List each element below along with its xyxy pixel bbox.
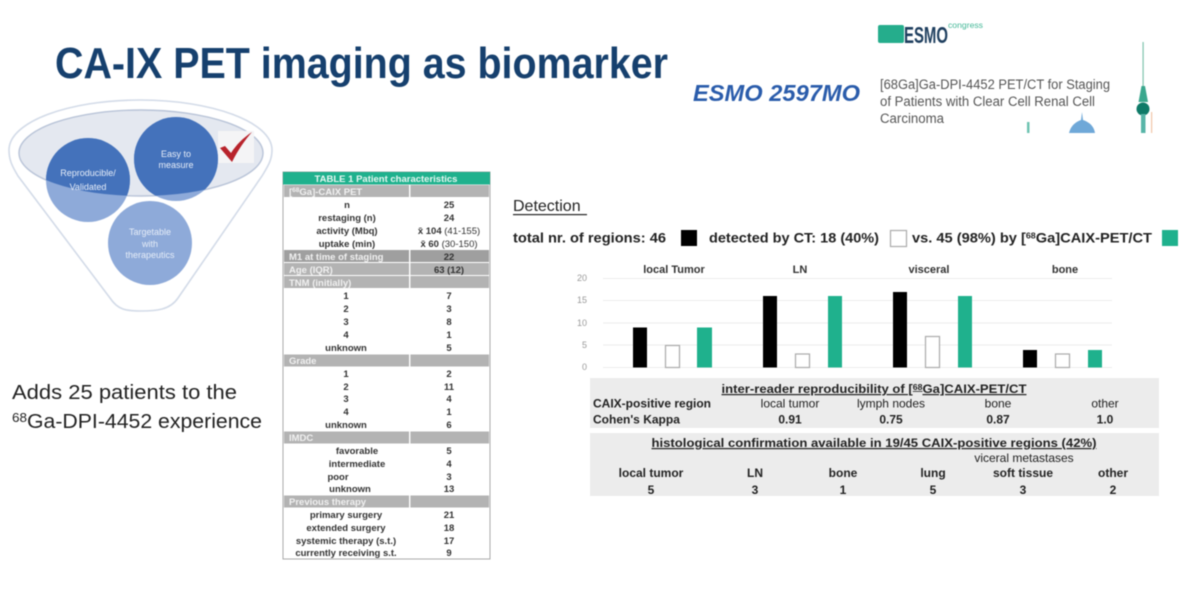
circle: easy to measure: measure (158, 160, 194, 170)
panel: inter-reader reproducibility: other (1091, 396, 1119, 410)
left column labels: restaging (n) (318, 213, 376, 224)
right column values: x̄ 104 (41-155) (418, 226, 480, 237)
right column values: 7 (446, 291, 452, 302)
left column labels: 2 (343, 382, 349, 393)
left column labels: 4 (343, 330, 349, 341)
circle: reproducible (46, 138, 130, 222)
panel: histological confirmation: viceral metastases (974, 451, 1074, 465)
legend: Ga]CAIX-PET/CT (1036, 230, 1152, 246)
left column labels: activity (Mbq) (316, 226, 378, 237)
panel: histological confirmation: bone (829, 466, 858, 480)
right column values: 6 (446, 420, 452, 431)
panel: histological confirmation: 5 (648, 483, 655, 497)
panel: histological confirmation (590, 433, 1159, 497)
panel: histological confirmation: 2 (1110, 483, 1117, 497)
section headings (289, 187, 384, 508)
panel: inter-reader reproducibility: Cohen's Kappa (593, 412, 680, 426)
left column labels: favorable (336, 446, 378, 457)
chart axis: 0 (582, 362, 587, 372)
panel: inter-reader reproducibility: lymph nodes (857, 396, 925, 410)
legend: total nr. of regions: 46 (513, 230, 666, 246)
left column labels: unknown (325, 420, 367, 431)
funnel diagram (9, 100, 272, 311)
right column values: 22 (444, 252, 454, 263)
left column labels: poor (327, 472, 349, 483)
left column labels: n (344, 200, 350, 211)
circle: targetable: Targetable (129, 227, 171, 237)
right column values: 4 (446, 394, 452, 405)
panel: inter-reader reproducibility: 0.75 (879, 412, 903, 426)
abstract title: of Patients with Clear Cell Renal Cell (880, 94, 1095, 109)
patients added note (12, 381, 262, 433)
patients added note: 68 (12, 410, 27, 425)
table header: TABLE 1 Patient characteristics (315, 174, 457, 185)
ESMO logo: congress (948, 20, 983, 30)
panel: histological confirmation: other (1098, 466, 1128, 480)
section headings: TNM (initially) (289, 278, 351, 289)
panel: histological confirmation: 1 (840, 483, 847, 497)
left column labels: intermediate (329, 459, 385, 470)
table: patient characteristics (283, 172, 490, 559)
circle: reproducible: Reproducible/ (60, 168, 116, 178)
bar chart (577, 264, 1112, 372)
abstract title: Carcinoma (880, 111, 944, 126)
right column values: 1 (446, 330, 452, 341)
chart axis: 5 (582, 340, 587, 350)
right column values: 21 (444, 510, 455, 521)
icon: red check mark (218, 131, 254, 163)
left column labels: currently receiving s.t. (295, 548, 397, 559)
chart axis: 15 (577, 295, 587, 305)
section headings: Ga]-CAIX PET (299, 187, 362, 198)
circle: easy to measure (134, 117, 218, 201)
circle: targetable: therapeutics (125, 250, 175, 260)
left column labels: 1 (343, 369, 349, 380)
abstract title (880, 77, 1110, 126)
left column labels: 1 (343, 291, 349, 302)
right column values: 17 (444, 536, 454, 547)
right column values: 3 (446, 304, 452, 315)
chart category labels (643, 264, 1078, 276)
left column labels: 3 (343, 317, 349, 328)
chart category labels: visceral (909, 264, 949, 276)
abstract title: [68Ga]Ga-DPI-4452 PET/CT for Staging (880, 77, 1110, 92)
section headings: IMDC (289, 433, 313, 444)
left column labels: unknown (329, 484, 371, 495)
panel: histological confirmation: LN (747, 466, 763, 480)
section headings: Age (IQR) (289, 265, 333, 276)
right column values: 1 (446, 407, 452, 418)
right column values (418, 200, 480, 559)
right column values: 8 (446, 317, 452, 328)
section headings: [ (289, 187, 292, 198)
right column values: 4 (446, 459, 452, 470)
bars: LN (763, 296, 842, 368)
detection heading: Detection (513, 198, 581, 215)
ESMO logo (878, 20, 983, 48)
panel: histological confirmation: local tumor (619, 466, 684, 480)
panel: histological confirmation: soft tissue (993, 466, 1053, 480)
circle: reproducible: Validated (70, 182, 106, 192)
patients added note: Adds 25 patients to the (12, 381, 237, 404)
left column labels: uptake (min) (319, 239, 375, 250)
right column values: 5 (446, 343, 452, 354)
section headings: M1 at time of staging (289, 252, 384, 263)
panel: histological confirmation: 5 (930, 483, 937, 497)
chart axis: 20 (577, 273, 587, 283)
abstract number: ESMO 2597MO (693, 80, 860, 106)
right column values: 25 (444, 200, 455, 211)
right column values: 11 (444, 382, 455, 393)
section bands (284, 185, 489, 508)
table header (283, 172, 490, 185)
panel: histological confirmation: histological confirmation available in 19/45 CAIX-positive regions (42%) (652, 436, 1097, 450)
left column labels: extended surgery (306, 523, 386, 534)
right column values: 5 (446, 446, 452, 457)
bars: visceral (893, 292, 972, 368)
right column values: 18 (444, 523, 454, 534)
ESMO logo: ESMO (904, 22, 948, 48)
chart axis (577, 273, 1112, 372)
chart category labels: bone (1052, 264, 1078, 276)
panel: histological confirmation: 3 (752, 483, 759, 497)
panel: inter-reader reproducibility (590, 378, 1159, 428)
left column labels: 4 (343, 407, 349, 418)
funnel opening (19, 110, 263, 196)
legend: 68 (1026, 230, 1036, 240)
legend: CT swatch (681, 230, 697, 246)
panel: inter-reader reproducibility: bone (985, 396, 1012, 410)
patients added note: Ga-DPI-4452 experience (27, 410, 262, 433)
section headings: Grade (289, 356, 316, 367)
right column values: 2 (446, 369, 452, 380)
panel: inter-reader reproducibility: 0.87 (986, 412, 1010, 426)
left column labels: primary surgery (310, 510, 383, 521)
funnel outline (9, 100, 272, 311)
section headings: Previous therapy (289, 497, 367, 508)
legend (513, 230, 1178, 246)
legend: vs. 45 (98%) by [ (912, 230, 1021, 246)
panel: inter-reader reproducibility: 68 (913, 383, 923, 392)
circle: targetable (108, 201, 192, 285)
bars: local tumor (633, 328, 712, 368)
chart category labels: local Tumor (643, 264, 705, 276)
left column labels (295, 200, 397, 559)
chart axis: 10 (577, 318, 587, 328)
right column values: 13 (444, 484, 454, 495)
left column labels: systemic therapy (s.t.) (296, 536, 396, 547)
bars: bone (1023, 350, 1102, 368)
panel: histological confirmation: lung (920, 466, 946, 480)
panel: inter-reader reproducibility: CAIX-positive region (593, 396, 711, 410)
table frame (283, 172, 490, 559)
right column values: 24 (444, 213, 455, 224)
right column values: 9 (446, 548, 452, 559)
legend: detected by CT: 18 (40%) (709, 230, 879, 246)
circle: targetable: with (141, 239, 158, 249)
icon: Berlin skyline (1027, 42, 1152, 133)
right column values: 63 (12) (434, 265, 464, 276)
legend: outline swatch (890, 230, 906, 246)
circle: easy to measure: Easy to (161, 149, 191, 159)
title: CA-IX PET imaging as biomarker (55, 39, 668, 88)
section headings: 68 (292, 187, 300, 194)
left column labels: unknown (325, 343, 367, 354)
right column values: x̄ 60 (30-150) (420, 239, 478, 250)
panel: histological confirmation: 3 (1020, 483, 1027, 497)
left column labels: 2 (343, 304, 349, 315)
legend: PET swatch (1162, 230, 1178, 246)
panel: inter-reader reproducibility: Ga]CAIX-PET/CT (922, 382, 1027, 396)
chart category labels: LN (793, 264, 807, 276)
panel: inter-reader reproducibility: 0.91 (778, 412, 802, 426)
right column values: 3 (446, 472, 452, 483)
left column labels: 3 (343, 394, 349, 405)
panel: inter-reader reproducibility: inter-reader reproducibility of [ (722, 382, 897, 396)
panel: inter-reader reproducibility: local tumor (761, 396, 819, 410)
panel: inter-reader reproducibility: 1.0 (1097, 412, 1114, 426)
